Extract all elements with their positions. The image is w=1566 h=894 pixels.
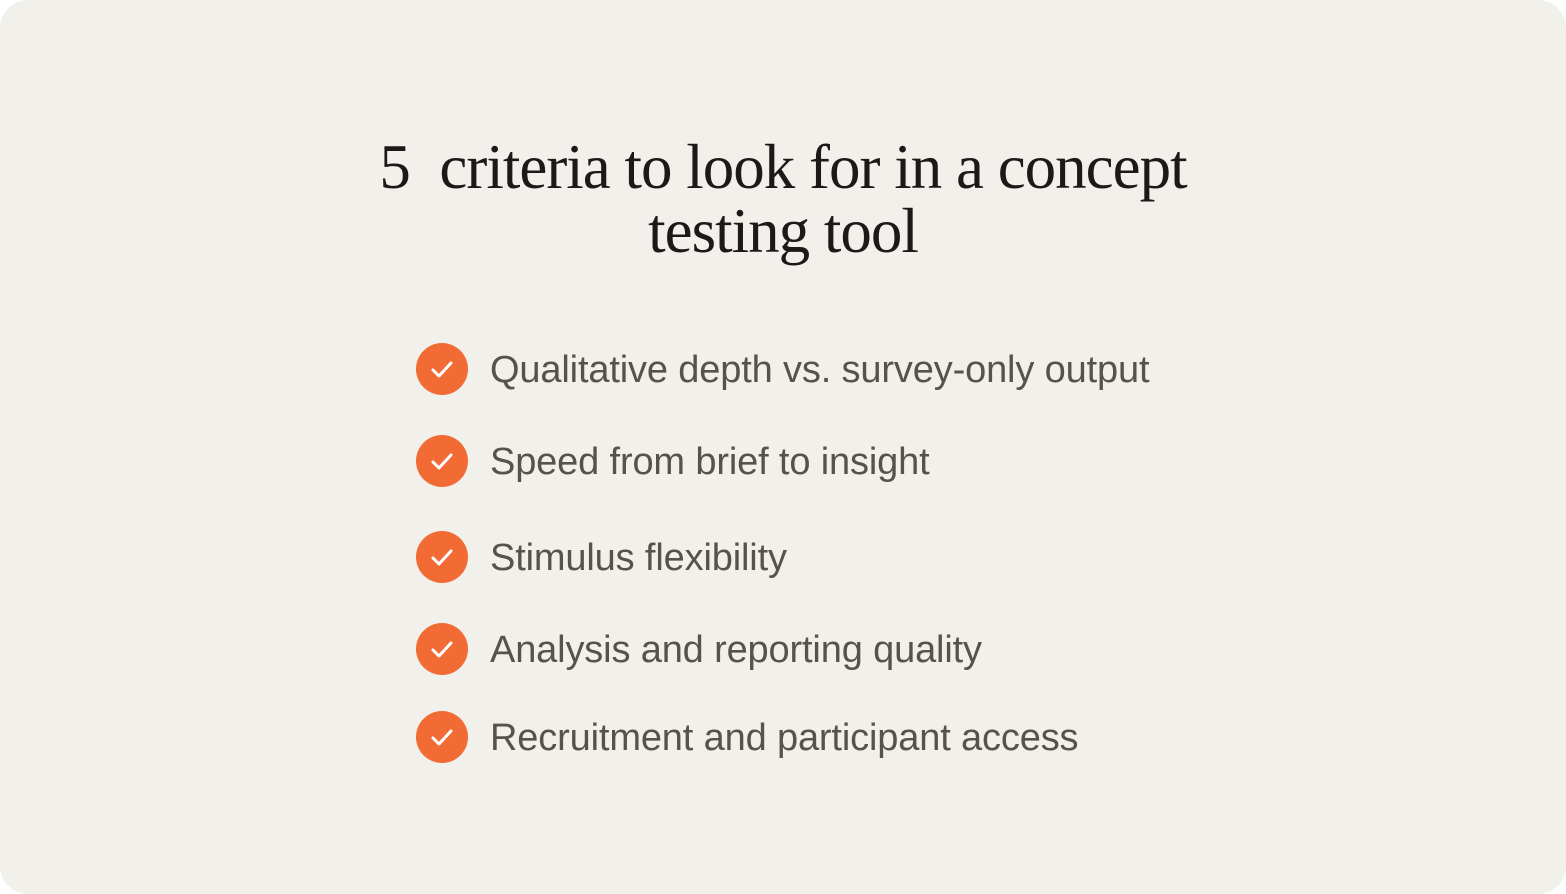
- icon: check: [416, 711, 468, 763]
- text: Recruitment and participant access: [490, 717, 1078, 759]
- item: recruitment: [416, 711, 1078, 763]
- item: speed: [416, 435, 930, 487]
- text: Stimulus flexibility: [490, 537, 787, 579]
- icon: check: [416, 435, 468, 487]
- title: 5 criteria to look for in a concept: [379, 132, 1187, 202]
- text: Speed from brief to insight: [490, 441, 930, 483]
- title: testing tool: [648, 196, 918, 266]
- item: stimulus: [416, 531, 787, 583]
- icon: check: [416, 623, 468, 675]
- title: [379, 132, 1188, 266]
- icon: check: [416, 343, 468, 395]
- icon: check: [416, 531, 468, 583]
- item: qualitative depth: [416, 343, 1150, 395]
- text: Qualitative depth vs. survey-only output: [490, 349, 1149, 391]
- text: Analysis and reporting quality: [490, 629, 982, 671]
- item: analysis: [416, 623, 982, 675]
